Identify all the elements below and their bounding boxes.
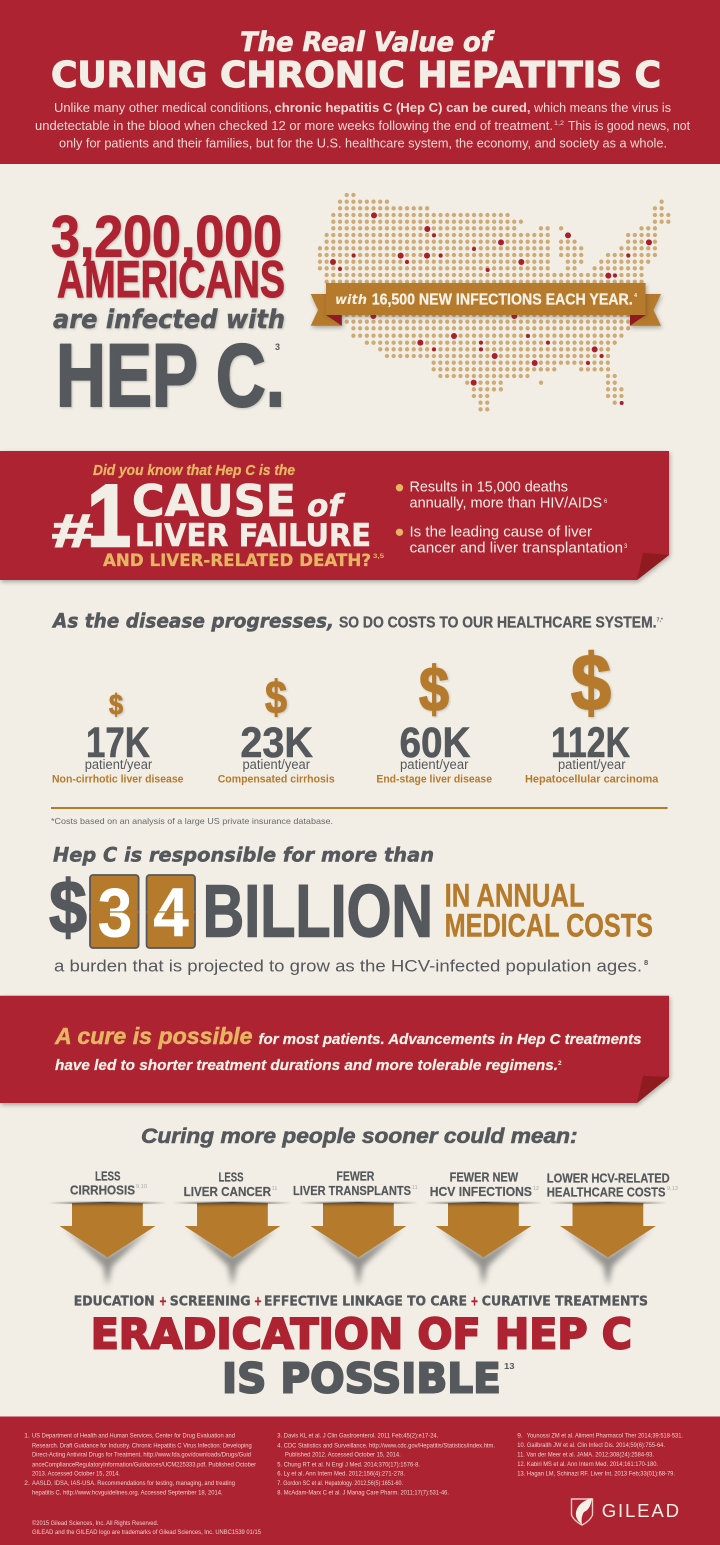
outcome: fewer new HCV infections: HCV INFECTIONS: [430, 1185, 532, 1199]
intro text: undetectable in the blood when checked 12 or more weeks following the end of treatment.: [35, 118, 553, 133]
intro text: chronic hepatitis C (Hep C) can be cured,: [274, 100, 530, 115]
intro text: This is good news, not: [568, 118, 690, 133]
section: 34 billion in costs: MEDICAL COSTS: [445, 908, 653, 944]
outcome: less liver cancer: 11: [272, 1186, 278, 1192]
cause of: CAUSE: [132, 476, 296, 527]
in annual medical costs: IN ANNUAL: [445, 878, 585, 914]
conclusion headline: ERADICATION OF HEP C: [91, 1309, 632, 1358]
cost column: hepatocellular carcinoma: [525, 638, 659, 786]
references column 1: Research. Draft Guidance for Industry. Chronic Hepatitis C Virus Infection: Developing: [32, 1442, 252, 1449]
cure heading: A cure is possible: [54, 1023, 253, 1049]
cost column: end-stage liver disease: End-stage liver disease: [376, 774, 492, 786]
strategy line: +: [254, 1293, 262, 1309]
references column 3: 10. Gailbraith JW et al. Clin Infect Dis. 2014;59(6):755-64.: [517, 1442, 665, 1449]
outcome: less cirrhosis: LESS: [95, 1170, 120, 1184]
references column 2: 5. Chung RT et al. N Engl J Med. 2014;370(17):1576-8.: [277, 1461, 420, 1468]
icon: down arrow: [48, 1202, 167, 1286]
cost column: end-stage liver disease: 60K: [400, 719, 470, 767]
references column 1: hepatitis C. http://www.hcvguidelines.org. Accessed September 18, 2014.: [32, 1489, 223, 1496]
heading: curing more people: Curing more people sooner could mean:: [141, 1125, 578, 1148]
outcome: lower healthcare costs: HEALTHCARE COSTS: [547, 1186, 666, 1200]
intro text: 1,2: [554, 121, 565, 127]
did you know: Did you know that Hep C is the: [93, 463, 295, 479]
heading: disease progression costs: 7,*: [656, 618, 664, 624]
cost column: non-cirrhotic: [52, 690, 184, 786]
copyright: ©2015 Gilead Sciences, Inc. All Rights Reserved.: [32, 1519, 158, 1527]
outcome: fewer new HCV infections: 12: [533, 1186, 539, 1192]
cost column: compensated cirrhosis: Compensated cirrhosis: [218, 774, 335, 786]
references column 1: anceComplianceRegulatoryInformation/Guidances/UCM225333.pdf. Published October: [32, 1461, 257, 1468]
icon: shield with leaf: [572, 1498, 592, 1525]
conclusion headline: IS POSSIBLE: [222, 1355, 501, 1403]
cost column: end-stage liver disease: [376, 655, 492, 786]
ribbon text: with: [335, 292, 367, 308]
are infected with: are infected with: [53, 305, 285, 335]
cost footnote: *Costs based on an analysis of a large US private insurance database.: [51, 816, 333, 826]
flip digit 3: 3: [98, 874, 132, 952]
intro text: [35, 100, 690, 150]
panel: a cure is possible: 2: [558, 1060, 562, 1067]
bullet: liver cancer: cancer and liver transplantation: [410, 541, 623, 557]
outcome: less cirrhosis: [48, 1170, 167, 1286]
dot map of the United States: [320, 195, 669, 409]
cost column: non-cirrhotic: 17K: [86, 719, 150, 767]
logo: Gilead: GILEAD: [602, 1500, 679, 1521]
references column 3: Younossi ZM et al. Aliment Pharmacol Ther 2014;39:518-531.: [527, 1433, 683, 1440]
footer panel: [0, 1416, 720, 1545]
cure text: for most patients. Advancements in Hep C treatments: [258, 1031, 642, 1048]
hash one: #: [52, 504, 93, 556]
page curl: [637, 553, 669, 580]
cost column: compensated cirrhosis: [218, 671, 335, 786]
outcome: lower healthcare costs: LOWER HCV-RELATED: [547, 1172, 670, 1186]
references column 3: 12. Kabiri MS et al. Ann Intern Med. 2014;161:170-180.: [517, 1461, 658, 1468]
outcome: less liver cancer: LESS: [218, 1171, 244, 1185]
references column 3: 13. Hagan LM, Schinazi RF. Liver Int. 2013 Feb;33(01):68-79.: [517, 1471, 675, 1478]
icon: dollar extra large: $: [571, 638, 611, 727]
strategy line: +: [470, 1293, 478, 1309]
references column 2: [277, 1433, 495, 1496]
outcome: fewer liver transplants: LIVER TRANSPLANTS: [293, 1184, 411, 1198]
icon: down arrow: [173, 1202, 292, 1286]
icon: down arrow: [299, 1202, 418, 1286]
outcome: less cirrhosis: 9,10: [136, 1184, 147, 1190]
billion: BILLION: [203, 870, 433, 952]
and liver-related death: AND LIVER-RELATED DEATH?: [103, 551, 371, 570]
references column 2: 7. Gordon SC et al. Hepatology. 2012;56(5):1651-60.: [277, 1480, 403, 1487]
cost column: hepatocellular carcinoma: patient/year: [558, 757, 626, 772]
references column 1: Direct-Acting Antiviral Drugs for Treatment. http://www.fda.gov/downloads/Drugs/Guid: [32, 1452, 251, 1459]
panel: a cure is possible: [0, 996, 669, 1103]
logo: Gilead: [572, 1498, 679, 1525]
3,200,000: 3,200,000: [51, 204, 282, 270]
outcome: less liver cancer: [173, 1171, 292, 1286]
strategy line: EFFECTIVE LINKAGE TO CARE: [264, 1293, 467, 1309]
heading: disease progression costs: As the disease progresses,: [51, 610, 334, 633]
lead-in heading: Hep C is responsible for more than: [53, 844, 434, 867]
intro text: Unlike many other medical conditions,: [54, 100, 272, 115]
icon: down arrow: [548, 1202, 668, 1286]
outcome: lower healthcare costs: 9,13: [667, 1186, 678, 1192]
references column 1: 1.: [24, 1433, 30, 1440]
cost column: end-stage liver disease: patient/year: [400, 757, 469, 772]
outcome: fewer liver transplants: [293, 1170, 418, 1286]
references column 1: 2.: [24, 1480, 30, 1487]
references column 3: [517, 1433, 683, 1478]
bullet: deaths: annually, more than HIV/AIDS: [410, 496, 602, 512]
icon: dollar small: $: [109, 690, 123, 722]
outcome: less cirrhosis: CIRRHOSIS: [70, 1184, 135, 1198]
intro text: only for patients and their families, but for the U.S. healthcare system, the economy, and society as a whole.: [59, 136, 667, 150]
bullet: liver cancer: 3: [624, 544, 628, 550]
references column 3: 11. Van der Meer et al. JAMA. 2012;308(24):2584-93.: [517, 1452, 654, 1459]
references column 1: US Department of Health and Human Services, Center for Drug Evaluation and: [32, 1433, 235, 1440]
dollar sign: $: [49, 865, 87, 949]
bullet: deaths: 6: [604, 499, 608, 505]
strategy line: EDUCATION: [74, 1293, 155, 1309]
ribbon: new infections: 4: [634, 293, 638, 299]
bullet: liver cancer: Is the leading cause of liver: [410, 525, 592, 541]
outcome: fewer new HCV infections: [424, 1171, 543, 1286]
heading: disease progression costs: SO DO COSTS TO OUR HEALTHCARE SYSTEM.: [339, 615, 656, 632]
Americans: AMERICANS: [57, 251, 285, 309]
references column 2: 6. Ly et al. Ann Intern Med. 2012;156(4):271-278.: [277, 1471, 405, 1478]
references column 2: Published 2012. Accessed October 15, 2014.: [285, 1452, 401, 1459]
headline: 3,200,000 Americans infected: [51, 204, 285, 425]
cost column: compensated cirrhosis: patient/year: [242, 757, 310, 772]
references column 2: 3. Davis KL et al. J Clin Gastroenterol. 2011 Feb;45(2):e17-24.: [277, 1433, 438, 1440]
outcome: lower healthcare costs: [547, 1172, 678, 1286]
outcome: less liver cancer: LIVER CANCER: [184, 1185, 271, 1199]
bullet: deaths: Results in 15,000 deaths: [410, 480, 568, 496]
cost column: non-cirrhotic: patient/year: [85, 757, 153, 772]
references column 3: 9.: [517, 1433, 523, 1440]
icon: down arrow: [424, 1202, 543, 1286]
references column 1: [24, 1433, 257, 1496]
page curl: [637, 1076, 669, 1103]
ribbon: new infections: [311, 283, 661, 326]
references column 2: 8. McAdam-Marx C et al. J Manag Care Pharm. 2011;17(7):531-46.: [277, 1489, 449, 1496]
bullet: liver cancer: [396, 525, 628, 557]
cost column: hepatocellular carcinoma: 112K: [551, 719, 630, 767]
cost column: non-cirrhotic: Non-cirrhotic liver disease: [52, 774, 184, 786]
infection hot spots: [330, 212, 652, 405]
footnote 3: 3: [275, 342, 280, 352]
panel: number one cause of liver failure: of: [307, 489, 346, 524]
ribbon: new infections: 16,500 NEW INFECTIONS EACH YEAR.: [372, 291, 633, 308]
copyright: GILEAD and the GILEAD logo are trademarks of Gilead Sciences, Inc. UNBC1539 01/15: [32, 1529, 261, 1536]
conclusion headline: [91, 1309, 632, 1403]
cost column: compensated cirrhosis: 23K: [240, 719, 313, 767]
strategy line: [74, 1293, 648, 1309]
burden sentence: a burden that is projected to grow as the HCV-infected population ages.: [54, 957, 642, 976]
references column 2: 4. CDC Statistics and Surveillance. http://www.cdc.gov/Hepatitis/Statistics/index.htm.: [277, 1442, 495, 1449]
references column 1: AASLD, IDSA, IAS-USA. Recommendations for testing, managing, and treating: [32, 1480, 235, 1487]
strategy line: CURATIVE TREATMENTS: [482, 1293, 648, 1309]
strategy line: SCREENING: [170, 1293, 250, 1309]
header panel: [0, 0, 720, 164]
copyright: [32, 1519, 261, 1536]
bullet: deaths: [396, 480, 608, 512]
outcome: fewer liver transplants: 11: [412, 1185, 418, 1191]
title line 2: CURING CHRONIC HEPATITIS C: [51, 55, 661, 96]
section: 34 billion in costs: [49, 844, 653, 976]
icon: dollar medium: $: [265, 671, 287, 723]
outcome: fewer new HCV infections: FEWER NEW: [450, 1171, 518, 1185]
flip digit 4: 4: [153, 874, 189, 952]
strategy line: +: [159, 1293, 167, 1309]
outcome: fewer liver transplants: FEWER: [336, 1170, 374, 1184]
conclusion headline: 13: [504, 1362, 515, 1371]
panel: number one cause of liver failure: 3,5: [373, 554, 385, 560]
icon: dollar large: $: [419, 655, 449, 725]
panel: number one cause of liver failure: 1: [87, 466, 131, 565]
intro text: which means the virus is: [533, 100, 671, 115]
references column 1: 2013. Accessed October 15, 2014.: [32, 1471, 120, 1478]
title line 1: The Real Value of: [240, 27, 495, 58]
Hep C.: HEP C.: [56, 325, 285, 425]
panel: number one cause of liver failure: [0, 451, 669, 580]
liver failure: LIVER FAILURE: [135, 518, 371, 554]
heading: disease progression costs: [51, 610, 664, 633]
section: 34 billion in costs: 8: [644, 958, 648, 967]
panel: a cure is possible: have led to shorter treatment durations and more tolerable regimens.: [55, 1057, 558, 1074]
cost column: hepatocellular carcinoma: Hepatocellular carcinoma: [525, 774, 659, 786]
